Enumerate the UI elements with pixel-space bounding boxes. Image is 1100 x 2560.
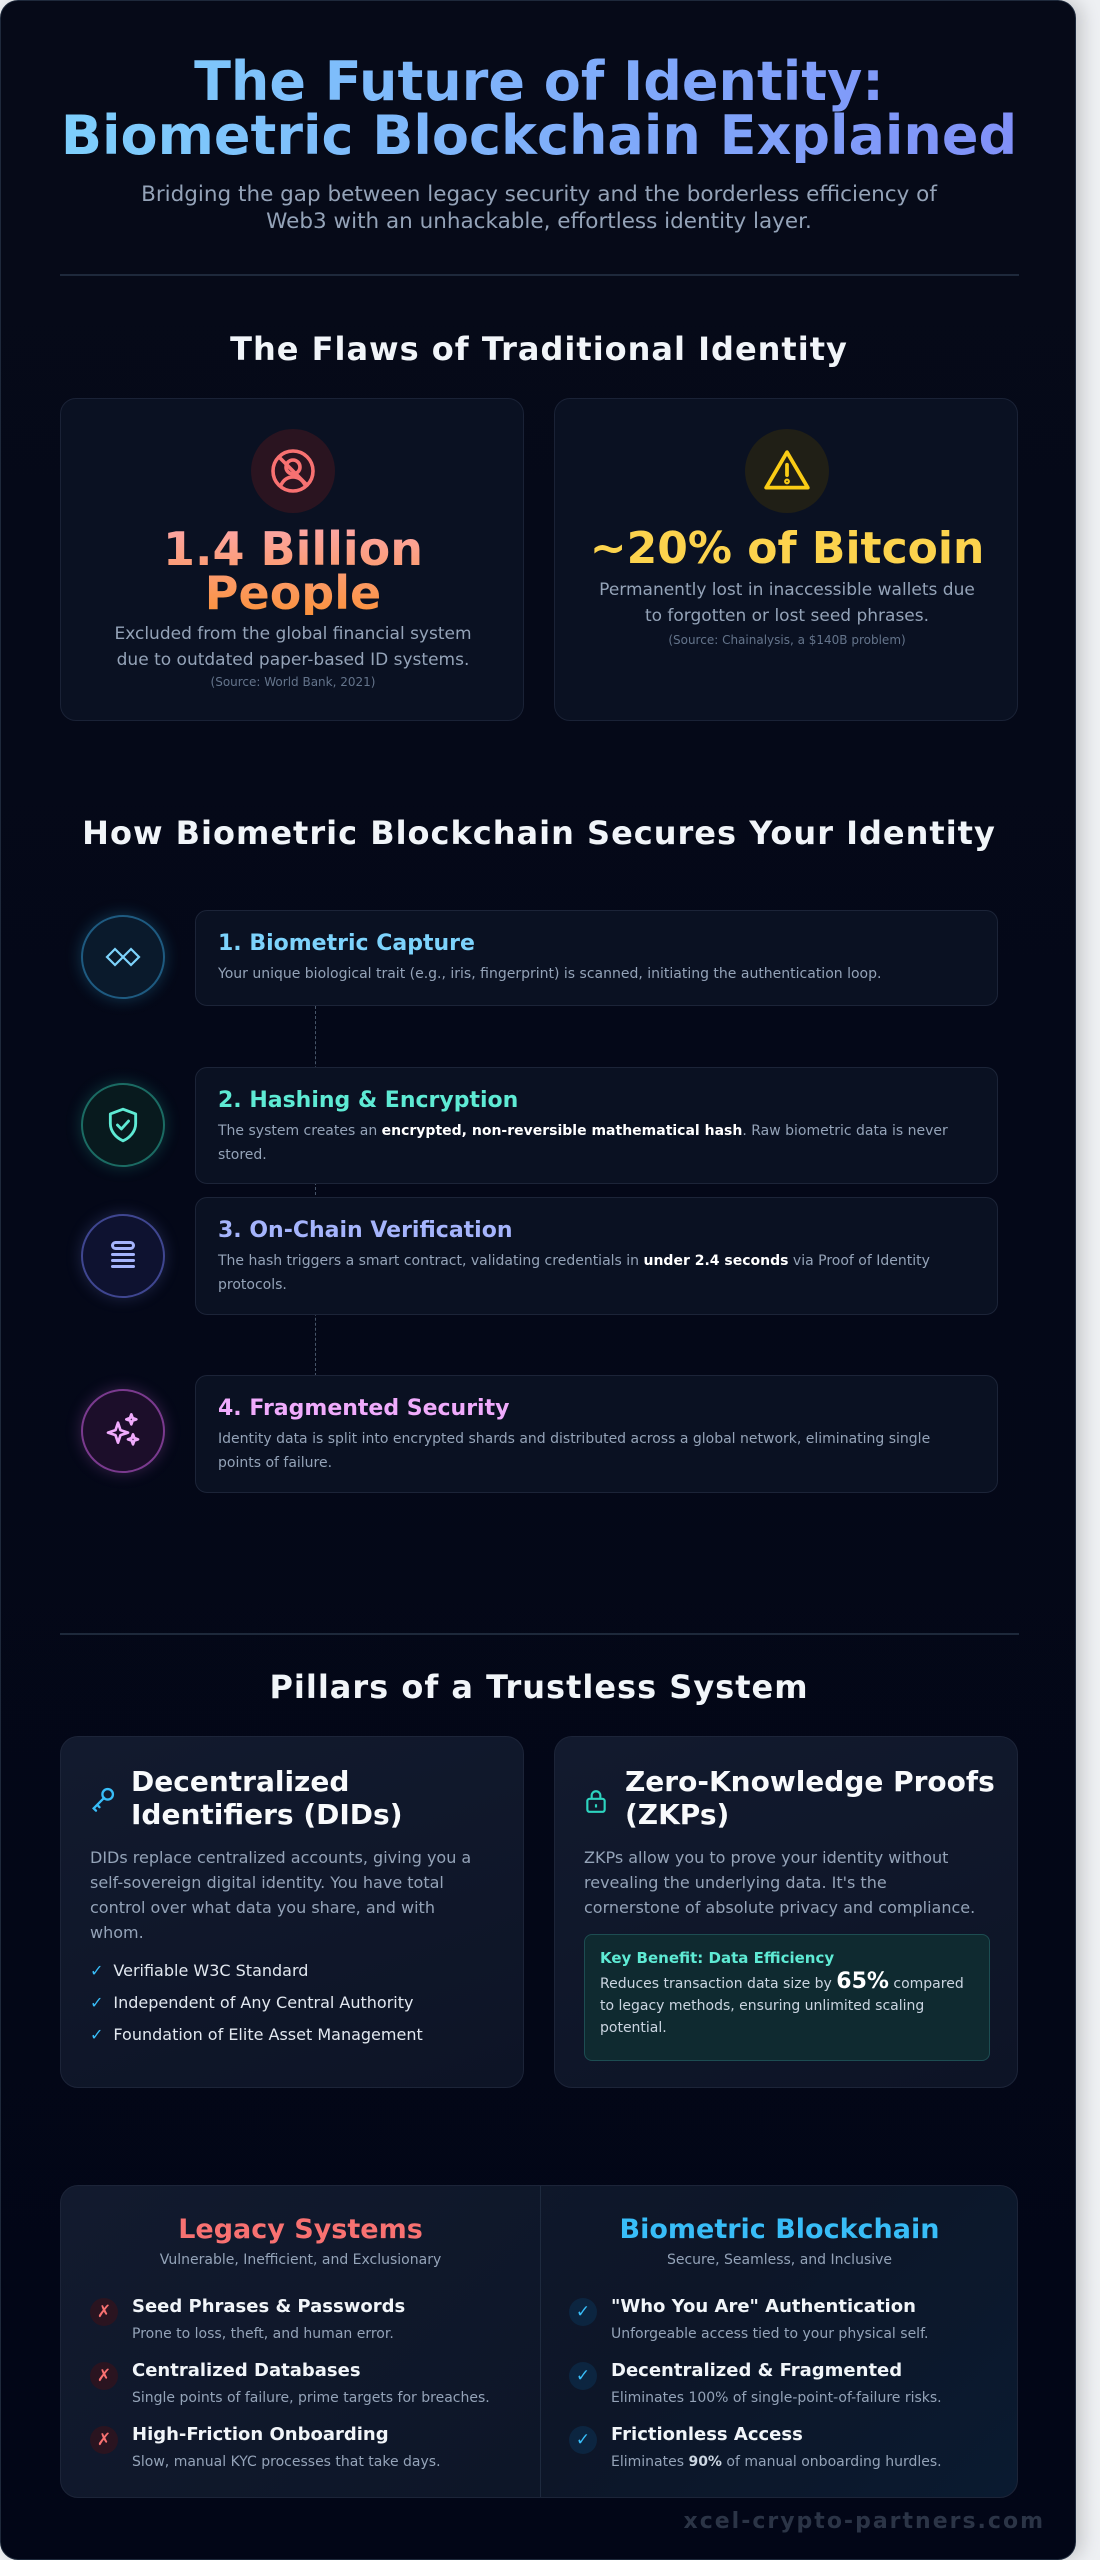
panel: ZKPs: Zero-Knowledge Proofs	[625, 1765, 995, 1798]
description	[599, 580, 975, 626]
panel: 1.4 billion	[60, 398, 524, 721]
callout: key benefit: Reduces transaction data size by 65% compared to legacy methods, ensuring unlimited scaling potential.	[600, 1969, 964, 2036]
source: (Source: Chainalysis, a $140B problem)	[668, 633, 906, 647]
icon: key	[92, 1788, 114, 1812]
legacy column	[90, 2214, 490, 2470]
step 3: The hash triggers a smart contract, validating credentials in under 2.4 seconds via Proof of Identity protocols.	[218, 1253, 930, 1293]
step 1	[195, 910, 998, 1006]
panel: DIDs: ✓ Independent of Any Central Authority	[90, 1993, 413, 2012]
biometric column: Biometric Blockchain	[620, 2214, 939, 2245]
description: due to outdated paper-based ID systems.	[117, 650, 469, 670]
panel: DIDs: Identifiers (DIDs)	[131, 1798, 402, 1831]
panel: DIDs: DIDs replace centralized accounts, giving you a self-sovereign digital identity. You have total control over what data you share, and with whom.	[90, 1848, 471, 1942]
subtitle: Bridging the gap between legacy security and the borderless efficiency of	[141, 182, 937, 207]
footer watermark: xcel-crypto-partners.com	[684, 2509, 1045, 2534]
biometric column: Eliminates 100% of single-point-of-failure risks.	[611, 2390, 942, 2406]
step 1: 1. Biometric Capture	[218, 931, 475, 956]
biometric column	[569, 2214, 942, 2470]
legacy column: ✗	[97, 2366, 111, 2386]
biometric column: Frictionless Access	[611, 2424, 803, 2445]
dashed connector	[315, 1006, 316, 1376]
icon: step3	[81, 1214, 165, 1298]
legacy column: Single points of failure, prime targets for breaches.	[132, 2390, 490, 2406]
panel: DIDs: ✓ Verifiable W3C Standard	[90, 1961, 308, 1980]
icon: step1	[81, 915, 165, 999]
title: Biometric Blockchain Explained	[61, 104, 1017, 167]
checklist	[90, 1961, 423, 2044]
panel: ZKPs: ZKPs allow you to prove your identity without	[584, 1848, 948, 1867]
panel: DIDs: Decentralized	[131, 1765, 349, 1798]
heading: how: How Biometric Blockchain Secures Your Identity	[82, 814, 996, 852]
subtitle	[141, 182, 938, 234]
legacy column: High-Friction Onboarding	[132, 2424, 389, 2445]
heading: flaws: The Flaws of Traditional Identity	[230, 330, 848, 368]
item	[90, 2360, 490, 2406]
biometric column: Secure, Seamless, and Inclusive	[667, 2252, 892, 2268]
panel: ZKPs	[554, 1736, 1018, 2088]
heading: pillars: Pillars of a Trustless System	[269, 1668, 809, 1706]
biometric column: Eliminates 90% of manual onboarding hurdles.	[611, 2454, 942, 2470]
step 2	[195, 1067, 998, 1184]
biometric column: ✓	[576, 2430, 590, 2450]
icon: lock	[586, 1790, 606, 1813]
step 2: The system creates an encrypted, non-reversible mathematical hash. Raw biometric data is never stored.	[218, 1123, 948, 1163]
step 4: 4. Fragmented Security	[218, 1396, 509, 1421]
biometric column: Decentralized & Fragmented	[611, 2360, 902, 2381]
panel: DIDs	[60, 1736, 524, 2088]
panel: ZKPs: (ZKPs)	[625, 1798, 729, 1831]
title: The Future of Identity:	[194, 50, 884, 113]
stat: 1.4 Billion	[163, 522, 423, 576]
step 3	[195, 1197, 998, 1315]
panel: bitcoin	[554, 398, 1018, 721]
item	[90, 2296, 405, 2342]
source: (Source: World Bank, 2021)	[211, 675, 375, 689]
description: Permanently lost in inaccessible wallets due	[599, 580, 975, 600]
title	[1, 55, 1077, 163]
step 2: 2. Hashing & Encryption	[218, 1088, 518, 1113]
stat	[61, 527, 525, 615]
legacy column: Slow, manual KYC processes that take days.	[132, 2454, 441, 2470]
icon: step4	[81, 1389, 165, 1473]
comparison panel	[60, 2185, 1018, 2498]
description	[114, 624, 472, 670]
legacy column: Vulnerable, Inefficient, and Exclusionary	[160, 2252, 441, 2268]
stat: People	[205, 566, 381, 620]
step 4	[195, 1375, 998, 1493]
item	[569, 2360, 942, 2406]
icon: step2	[81, 1083, 165, 1167]
legacy column: ✗	[97, 2302, 111, 2322]
description: Excluded from the global financial system	[114, 624, 472, 644]
panel: DIDs: ✓ Foundation of Elite Asset Management	[90, 2025, 423, 2044]
panel: ZKPs: revealing the underlying data. It's the	[584, 1873, 887, 1892]
callout: key benefit	[584, 1934, 990, 2061]
icon: excluded user	[251, 429, 335, 513]
step 4: Identity data is split into encrypted shards and distributed across a global network, eliminating single points of failure.	[218, 1431, 930, 1471]
item	[569, 2296, 928, 2342]
legacy column: Seed Phrases & Passwords	[132, 2296, 405, 2317]
biometric column: ✓	[576, 2302, 590, 2322]
step 1: Your unique biological trait (e.g., iris, fingerprint) is scanned, initiating the authentication loop.	[218, 966, 881, 982]
stat: ~20% of Bitcoin	[590, 523, 984, 574]
biometric column: Unforgeable access tied to your physical self.	[611, 2326, 928, 2342]
biometric column: ✓	[576, 2366, 590, 2386]
legacy column: ✗	[97, 2430, 111, 2450]
subtitle: Web3 with an unhackable, effortless identity layer.	[266, 209, 812, 234]
legacy column: Centralized Databases	[132, 2360, 361, 2381]
legacy column: Prone to loss, theft, and human error.	[132, 2326, 394, 2342]
biometric column: "Who You Are" Authentication	[611, 2296, 916, 2317]
step 3: 3. On-Chain Verification	[218, 1218, 512, 1243]
icon: warning	[745, 429, 829, 513]
item	[569, 2424, 942, 2470]
description: to forgotten or lost seed phrases.	[645, 606, 929, 626]
item	[90, 2424, 441, 2470]
callout: key benefit: Key Benefit: Data Efficiency	[600, 1949, 834, 1967]
legacy column: Legacy Systems	[178, 2214, 423, 2245]
panel: ZKPs: cornerstone of absolute privacy and compliance.	[584, 1898, 975, 1917]
